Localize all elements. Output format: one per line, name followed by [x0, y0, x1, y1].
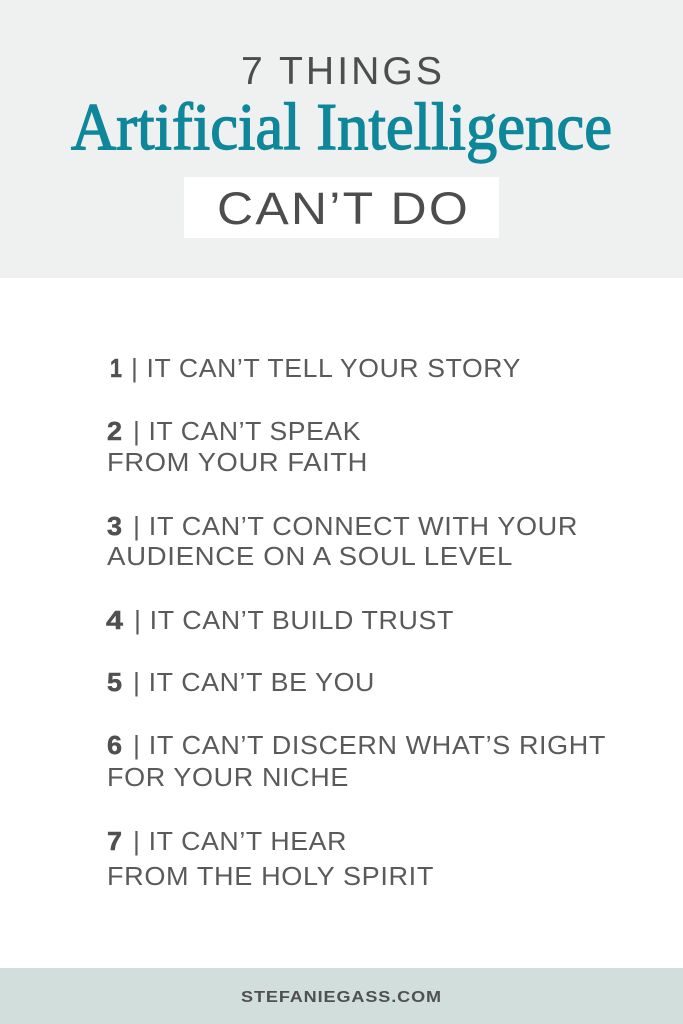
- item 1: | IT CAN’T TELL YOUR STORY: [131, 353, 521, 383]
- item 7: [107, 826, 434, 891]
- heading box: can't do: [184, 177, 499, 238]
- item 2: | IT CAN’T SPEAK: [133, 416, 361, 446]
- panel: header: [0, 0, 683, 278]
- item 5: 5: [107, 667, 122, 697]
- heading box: can't do: CAN’T DO: [217, 183, 470, 234]
- item 6: | IT CAN’T DISCERN WHAT’S RIGHT: [133, 730, 606, 760]
- item 3: [107, 511, 578, 571]
- item 3: | IT CAN’T CONNECT WITH YOUR: [133, 511, 578, 541]
- item 6: [107, 730, 606, 792]
- item 6: FOR YOUR NICHE: [107, 762, 349, 792]
- item 7: 7: [107, 826, 122, 856]
- footer bar: [0, 968, 683, 1024]
- item 3: AUDIENCE ON A SOUL LEVEL: [107, 541, 513, 571]
- heading: artificial intelligence: Artificial Intelligence: [71, 90, 612, 164]
- item 2: FROM YOUR FAITH: [107, 447, 368, 477]
- list: seven things: [106, 353, 606, 891]
- item 1: 1: [110, 353, 122, 383]
- item 4: 4: [106, 605, 124, 635]
- item 5: | IT CAN’T BE YOU: [133, 667, 375, 697]
- item 7: | IT CAN’T HEAR: [133, 826, 347, 856]
- item 3: 3: [107, 511, 122, 541]
- item 7: FROM THE HOLY SPIRIT: [107, 861, 434, 891]
- footer url: STEFANIEGASS.COM: [241, 989, 442, 1006]
- item 6: 6: [107, 730, 122, 760]
- item 2: 2: [107, 416, 122, 446]
- item 2: [107, 416, 368, 477]
- heading: 7 things: 7 THINGS: [241, 50, 445, 93]
- item 4: | IT CAN’T BUILD TRUST: [134, 605, 454, 635]
